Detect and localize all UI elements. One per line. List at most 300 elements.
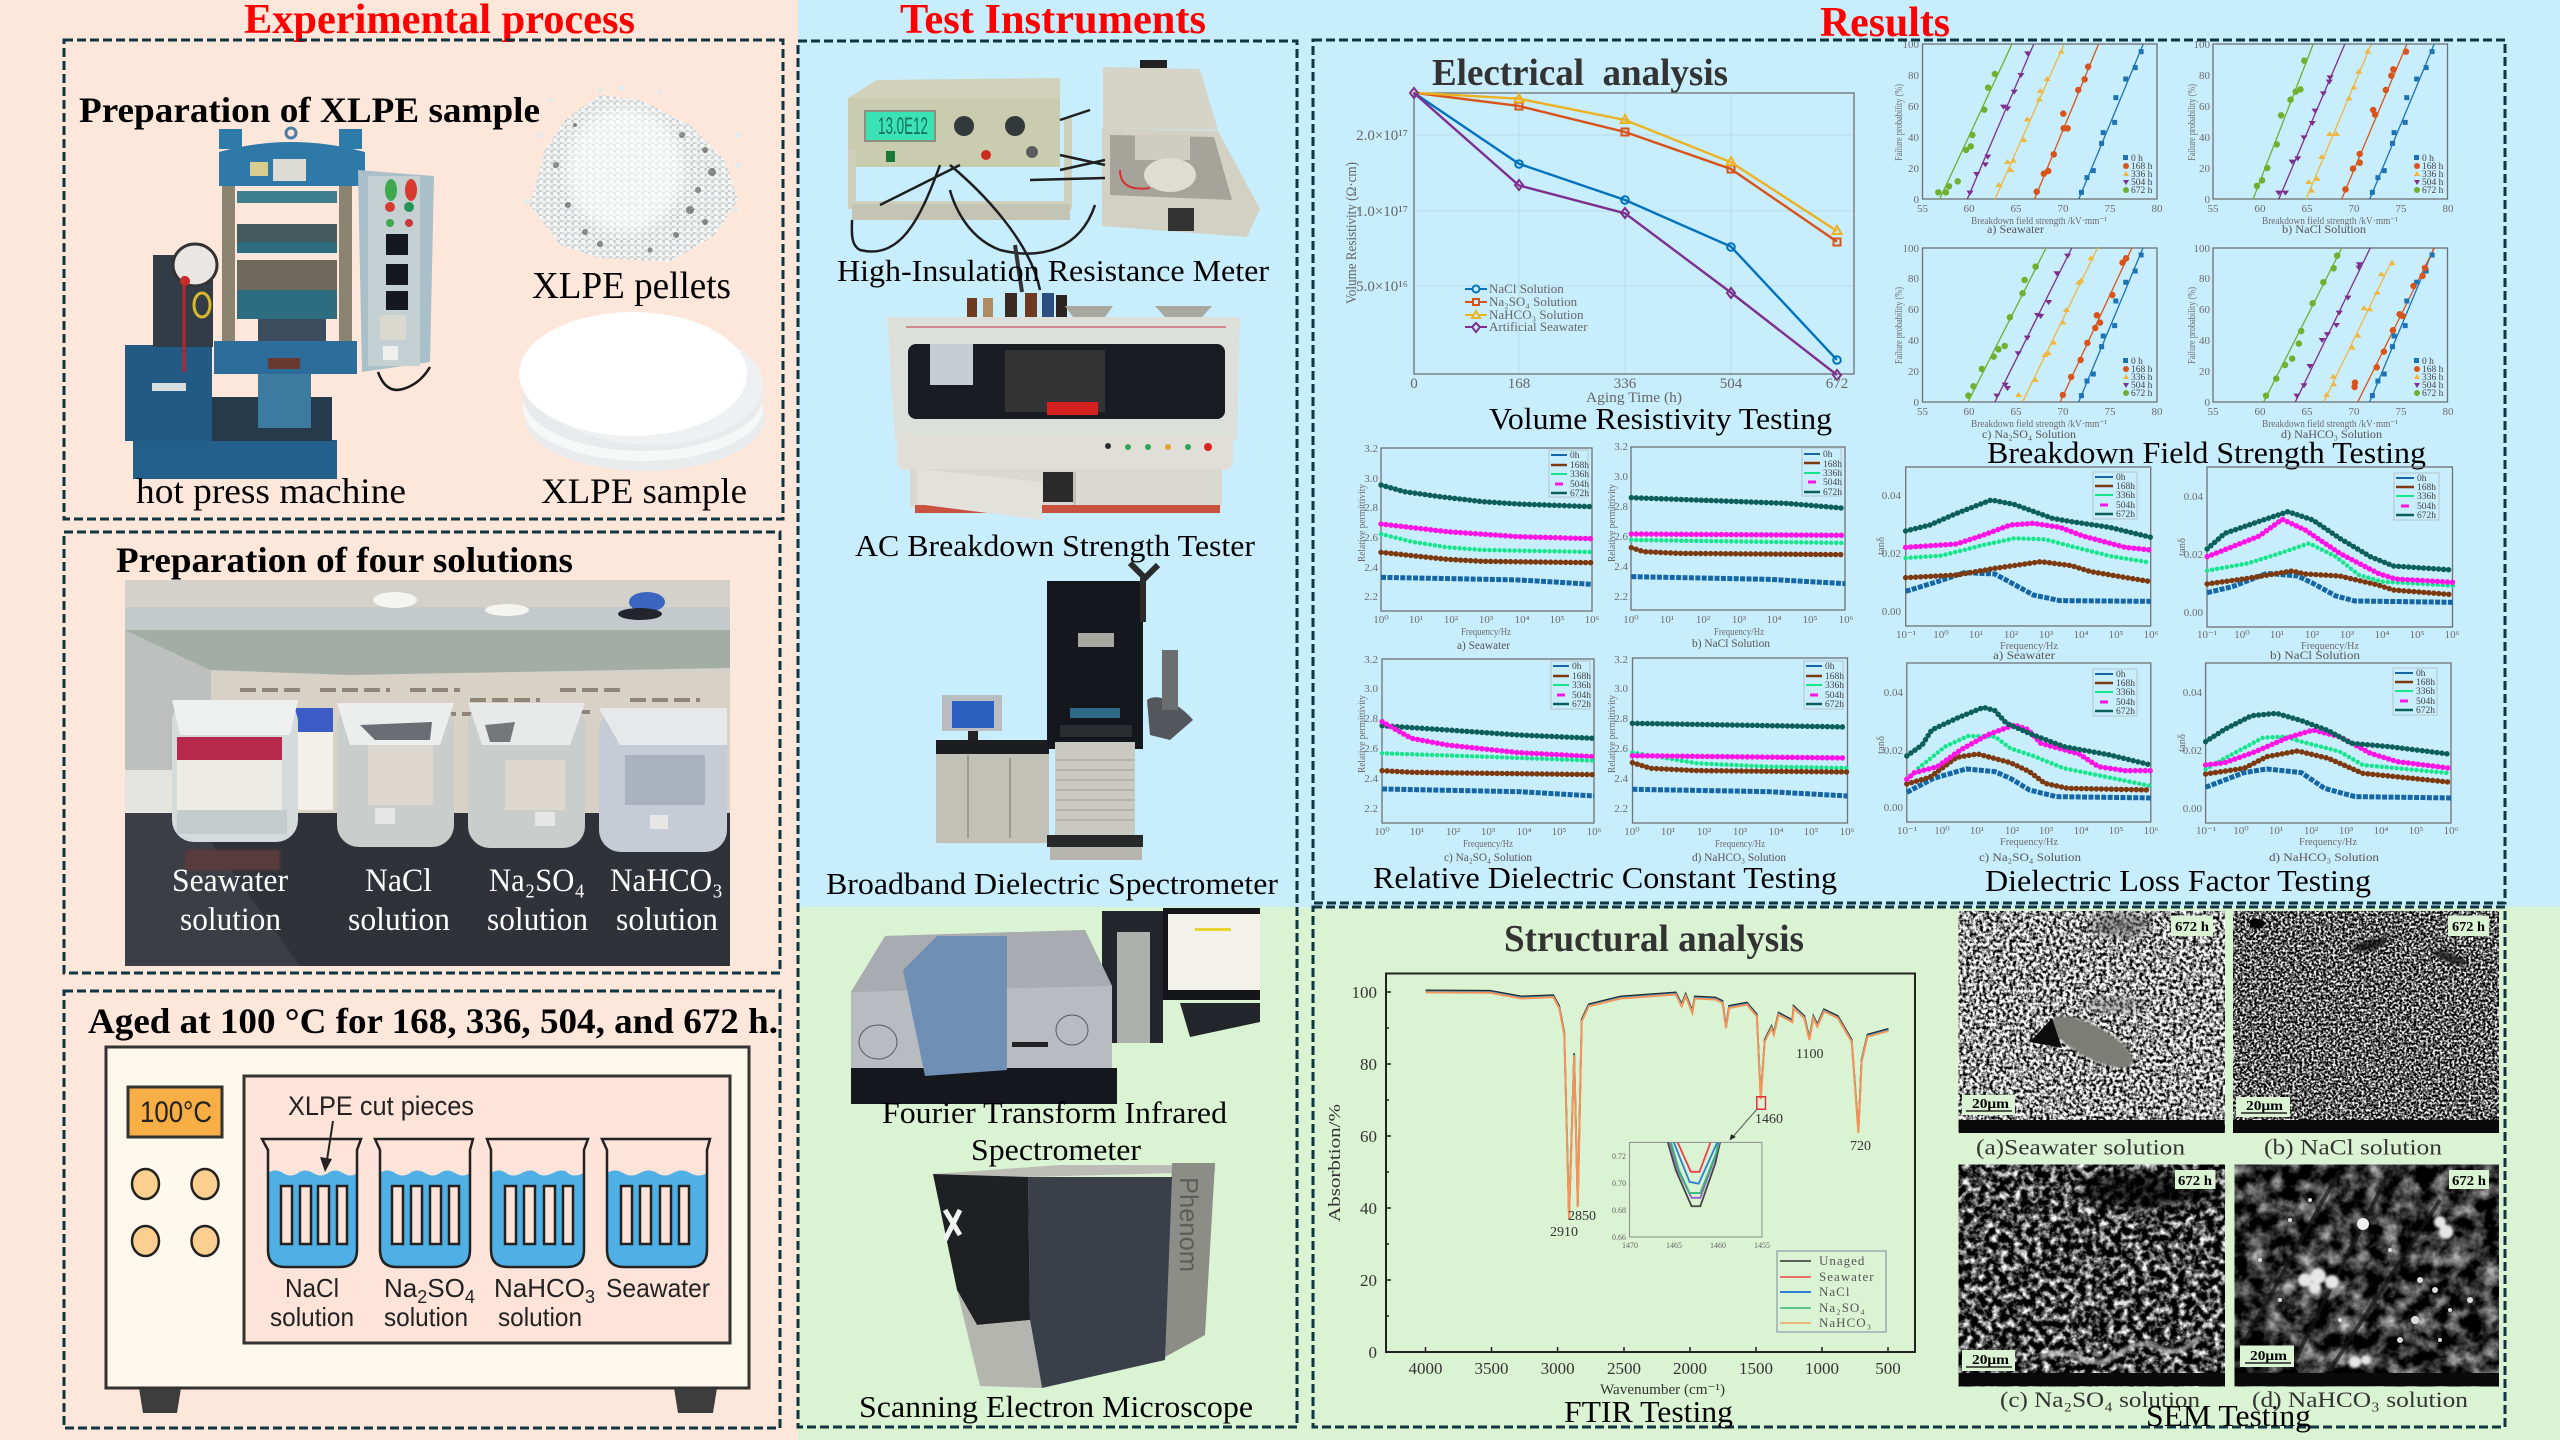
text: Preparation of XLPE sample: Preparation of XLPE sample	[79, 90, 540, 130]
chart: permittivity d) NaHCO3: 2.4	[1614, 773, 1628, 785]
legend: 672h	[1825, 700, 1844, 710]
chart: breakdown c) Na2SO4: 80	[1908, 273, 1920, 285]
chart: breakdown b) NaCl: 65	[2302, 203, 2313, 215]
chart: breakdown a) Seawater: 80	[2152, 203, 2163, 215]
chart: volume resistivity line chart: 168	[1508, 376, 1530, 392]
chart: FTIR spectra: 1500	[1739, 1359, 1773, 1378]
chart: dielectric loss b) NaCl: 0.04	[2184, 491, 2204, 503]
legend: FTIR samples: NaHCO₃	[1819, 1315, 1872, 1330]
chart: dielectric loss a) Seawater: 0.00	[1882, 606, 1902, 618]
photo: high-insulation resistance meter: 13.0E12	[878, 113, 928, 140]
legend: 672h	[2417, 511, 2436, 521]
label: Scanning Electron Microscope: Scanning Electron Microscope	[859, 1389, 1253, 1424]
chart: FTIR spectra: 1465	[1666, 1241, 1682, 1250]
chart: FTIR spectra: 2500	[1607, 1359, 1641, 1378]
panel: preparation of four solutions	[64, 532, 780, 973]
text: solution 1: solution	[180, 902, 281, 938]
legend	[2123, 357, 2153, 399]
chart: dielectric loss b) NaCl: 10²	[2305, 629, 2320, 641]
chart: FTIR spectra: 0.68	[1612, 1206, 1626, 1215]
chart: permittivity a) Seawater: 10⁰	[1373, 614, 1389, 626]
chart: permittivity c) Na2SO4: c) Na₂SO₄ Solution	[1444, 850, 1532, 864]
chart: dielectric loss d) NaHCO3: 10¹	[2269, 825, 2283, 837]
chart: volume resistivity line chart: 336	[1614, 376, 1637, 392]
chart: breakdown a) Seawater	[1893, 39, 2163, 236]
legend: 672 h	[2131, 186, 2153, 196]
chart: dielectric loss b) NaCl: 10⁴	[2375, 629, 2390, 641]
legend	[2123, 154, 2153, 196]
legend: 672h	[1823, 488, 1842, 498]
legend	[1804, 661, 1844, 710]
chart: breakdown c) Na2SO4: Failure probability (%)	[1893, 287, 1905, 364]
chart: permittivity d) NaHCO3: 3.2	[1614, 654, 1628, 666]
legend: 672 h	[2131, 389, 2153, 399]
chart: dielectric loss d) NaHCO3: 10²	[2304, 825, 2319, 837]
text: solution 4: solution	[616, 902, 718, 938]
legend: volume resistivity	[1465, 281, 1588, 334]
chart: permittivity b) NaCl: 2.6	[1614, 531, 1628, 543]
legend: volume resistivity: Artificial Seawater	[1489, 319, 1588, 334]
chart: FTIR spectra: Absorbtion/%	[1325, 1104, 1344, 1222]
legend: 336h	[1570, 470, 1589, 480]
chart: breakdown d) NaHCO3: 0	[2204, 397, 2210, 409]
chart: dielectric loss a) Seawater: 10¹	[1969, 629, 1983, 641]
chart: breakdown c) Na2SO4: 60	[1908, 304, 1920, 316]
chart: permittivity c) Na2SO4: 10⁰	[1374, 826, 1390, 838]
chart: dielectric loss a) Seawater: 0.04	[1882, 490, 1902, 502]
legend: 168h	[2416, 678, 2435, 688]
chart: permittivity b) NaCl: 3.2	[1614, 441, 1628, 453]
chart: breakdown c) Na2SO4: 70	[2058, 406, 2069, 418]
panel: results structural analysis	[1313, 907, 2505, 1433]
chart: FTIR spectra	[1325, 974, 1915, 1398]
chart: breakdown c) Na2SO4: 100	[1902, 243, 1920, 255]
legend: 0h	[1572, 662, 1582, 672]
label: XLPE cut pieces: XLPE cut pieces	[288, 1091, 474, 1121]
chart: dielectric loss a) Seawater: tanδ	[1875, 537, 1887, 555]
chart: permittivity c) Na2SO4: 10⁶	[1587, 826, 1602, 838]
chart: dielectric loss d) NaHCO3: 0.02	[2183, 745, 2202, 757]
chart: permittivity b) NaCl: Frequency/Hz	[1714, 626, 1764, 638]
chart: permittivity c) Na2SO4: 2.4	[1364, 773, 1378, 785]
icon: hot press machine photo	[125, 128, 434, 479]
chart: permittivity d) NaHCO3: Frequency/Hz	[1715, 838, 1765, 850]
chart: permittivity a) Seawater: a) Seawater	[1457, 638, 1510, 652]
chart: breakdown a) Seawater: 100	[1902, 39, 1920, 51]
chart: permittivity a) Seawater: Relative permittivity	[1356, 484, 1368, 562]
chart: volume resistivity line chart: Aging Time (h)	[1586, 390, 1682, 406]
icon: stacked XLPE sample discs	[519, 312, 765, 471]
chart: breakdown c) Na2SO4: 0	[1914, 397, 1920, 409]
label: NaCl solution: solution	[270, 1302, 354, 1332]
caption: (d) NaHCO3 solution: (d) NaHCO₃ solution	[2252, 1387, 2468, 1412]
text: NaCl: NaCl	[365, 863, 432, 899]
legend: 0h	[2116, 473, 2126, 483]
chart: breakdown a) Seawater: 75	[2104, 203, 2116, 215]
chart: dielectric loss c) Na2SO4: c) Na₂SO₄ Solution	[1979, 850, 2081, 864]
label: Na2SO4 solution: 2	[417, 1287, 427, 1307]
label: Na2SO4 solution: 4	[465, 1287, 475, 1307]
image: SEM NaCl: 20μm	[2246, 1099, 2283, 1114]
chart: breakdown d) NaHCO3: 100	[2194, 243, 2210, 255]
chart: permittivity b) NaCl: 2.4	[1614, 561, 1628, 573]
chart: permittivity d) NaHCO3: 2.8	[1614, 713, 1628, 725]
chart: permittivity b) NaCl: 10⁶	[1839, 614, 1854, 626]
image: SEM seawater: 20μm	[1972, 1097, 2009, 1112]
chart: breakdown d) NaHCO3: 55	[2208, 406, 2219, 418]
chart: permittivity d) NaHCO3: 10⁶	[1840, 826, 1855, 838]
label: Breakdown Field Strength Testing: Breakdown Field Strength Testing	[1987, 435, 2426, 470]
label: Na2SO4 solution: Na	[384, 1273, 475, 1307]
chart: permittivity a) Seawater: 10¹	[1409, 614, 1423, 626]
chart: dielectric loss a) Seawater: 10⁻¹	[1896, 629, 1916, 641]
chart: dielectric loss d) NaHCO3: tanδ	[2176, 734, 2188, 752]
chart: breakdown a) Seawater: 80	[1908, 70, 1920, 82]
legend: 0h	[2416, 669, 2426, 679]
chart: breakdown d) NaHCO3: Breakdown field strength /kV·mm⁻¹	[2262, 418, 2398, 430]
chart: dielectric loss a) Seawater: 10⁵	[2109, 629, 2124, 641]
chart: breakdown c) Na2SO4: 75	[2104, 406, 2116, 418]
label: Broadband Dielectric Spectrometer: Broadband Dielectric Spectrometer	[826, 866, 1279, 901]
chart: FTIR spectra: 60	[1360, 1127, 1377, 1146]
chart: breakdown b) NaCl: b) NaCl Solution	[2282, 222, 2366, 236]
chart: FTIR spectra: Wavenumber (cm⁻¹)	[1600, 1382, 1725, 1398]
chart: permittivity a) Seawater: 10⁴	[1515, 614, 1530, 626]
legend: 336 h	[2131, 373, 2153, 383]
chart: permittivity b) NaCl: 2.8	[1614, 501, 1628, 513]
legend: 336 h	[2422, 373, 2444, 383]
chart: permittivity d) NaHCO3: 10⁴	[1769, 826, 1784, 838]
chart: breakdown c) Na2SO4: Breakdown field strength /kV·mm⁻¹	[1971, 418, 2107, 430]
chart: FTIR spectra: 1460	[1710, 1241, 1726, 1250]
chart: dielectric loss a) Seawater: 10³	[2039, 629, 2054, 641]
chamber with beakers	[244, 1076, 730, 1343]
legend: 504 h	[2422, 178, 2444, 188]
chart: permittivity b) NaCl: 10²	[1696, 614, 1711, 626]
chart: breakdown d) NaHCO3: 60	[2254, 406, 2266, 418]
legend: 0h	[1825, 662, 1835, 672]
chart: FTIR spectra: 0.70	[1612, 1179, 1626, 1188]
chart: permittivity c) Na2SO4: 3.0	[1364, 683, 1378, 695]
chart: FTIR spectra: 0.66	[1612, 1233, 1626, 1242]
chart: permittivity d) NaHCO3: 2.6	[1614, 743, 1628, 755]
panel: aging oven	[64, 991, 780, 1428]
chart: permittivity d) NaHCO3	[1606, 654, 1855, 864]
chart: permittivity b) NaCl	[1606, 441, 1854, 650]
label: XLPE pellets: XLPE pellets	[532, 265, 731, 307]
chart: FTIR spectra: 80	[1360, 1055, 1377, 1074]
label: Fourier Transform Infrared Spectrometer: Spectrometer	[971, 1132, 1142, 1167]
chart: dielectric loss a) Seawater: 10⁴	[2074, 629, 2089, 641]
chart: permittivity b) NaCl: 10⁰	[1623, 614, 1639, 626]
chart: breakdown b) NaCl: 55	[2208, 203, 2219, 215]
legend: 168 h	[2131, 365, 2153, 375]
legend: FTIR samples: NaCl	[1819, 1284, 1850, 1299]
label: High-Insulation Resistance Meter: High-Insulation Resistance Meter	[837, 253, 1270, 288]
legend: volume resistivity: NaCl Solution	[1489, 281, 1564, 296]
legend	[2414, 154, 2444, 196]
chart: permittivity c) Na2SO4: 10⁵	[1552, 826, 1567, 838]
legend: 0 h	[2422, 154, 2434, 164]
chart: breakdown b) NaCl: 20	[2199, 163, 2210, 175]
text: Phenom brand on device: Phenom	[1174, 1177, 1204, 1272]
legend	[2393, 668, 2437, 716]
legend: 168h	[1825, 672, 1844, 682]
chart: breakdown c) Na2SO4: 80	[2152, 406, 2163, 418]
icon: oven body	[106, 1047, 749, 1388]
chart: breakdown d) NaHCO3: 80	[2199, 273, 2210, 285]
chart: dielectric loss b) NaCl: 10¹	[2270, 629, 2284, 641]
chart: breakdown a) Seawater: 20	[1908, 163, 1920, 175]
legend: 504 h	[2131, 178, 2153, 188]
legend: 168h	[1572, 672, 1591, 682]
legend: 168h	[1823, 460, 1842, 470]
chart: FTIR spectra: 3500	[1474, 1359, 1508, 1378]
chart: breakdown b) NaCl: 75	[2396, 203, 2407, 215]
chart: permittivity c) Na2SO4: 2.8	[1364, 713, 1378, 725]
chart: permittivity d) NaHCO3: 3.0	[1614, 683, 1628, 695]
label: Na2SO4 solution: SO	[427, 1273, 465, 1303]
chart: breakdown d) NaHCO3: Failure probability (%)	[2186, 287, 2198, 364]
legend: 0 h	[2131, 357, 2143, 367]
chart: breakdown c) Na2SO4: 65	[2010, 406, 2022, 418]
chart: FTIR spectra: 1455	[1754, 1241, 1770, 1250]
chart: permittivity c) Na2SO4: 10²	[1446, 826, 1461, 838]
chart: permittivity a) Seawater: 3.0	[1364, 473, 1378, 485]
legend: 336h	[1825, 681, 1844, 691]
chart: permittivity d) NaHCO3: d) NaHCO₃ Solution	[1692, 850, 1786, 864]
chart: dielectric loss d) NaHCO3: 10³	[2339, 825, 2354, 837]
chart: dielectric loss c) Na2SO4: 0.02	[1884, 745, 1903, 757]
chart: dielectric loss c) Na2SO4: 0.00	[1884, 802, 1904, 814]
icon: temperature display	[128, 1087, 222, 1137]
legend: volume resistivity: Na₂SO₄ Solution	[1489, 294, 1578, 309]
icon: beaker Na2SO4	[375, 1139, 473, 1267]
chart: permittivity a) Seawater: 10³	[1479, 614, 1494, 626]
photo: four beakers on lab bench	[125, 580, 730, 966]
chart: permittivity b) NaCl: 10¹	[1660, 614, 1674, 626]
label: Relative Dielectric Constant Testing: Relative Dielectric Constant Testing	[1373, 860, 1837, 895]
chart: permittivity a) Seawater: 3.2	[1364, 443, 1378, 455]
legend: FTIR samples	[1777, 1251, 1886, 1332]
chart: dielectric loss c) Na2SO4: 10⁴	[2074, 825, 2089, 837]
legend: 0h	[1823, 450, 1833, 460]
chart: volume resistivity line chart: 0	[1410, 376, 1418, 392]
chart: permittivity b) NaCl: 10⁵	[1803, 614, 1818, 626]
image: SEM NaHCO3: 20μm	[2250, 1349, 2287, 1364]
chart: FTIR spectra: 500	[1875, 1359, 1901, 1378]
legend: 504h	[2417, 502, 2436, 512]
legend: 336h	[2416, 687, 2435, 697]
text: solution 2: solution	[348, 902, 450, 938]
legend: 672 h	[2422, 186, 2444, 196]
legend: 672h	[2116, 510, 2135, 520]
chart: breakdown a) Seawater: a) Seawater	[1987, 222, 2044, 236]
legend: 672h	[1570, 489, 1589, 499]
legend: FTIR samples: Unaged	[1819, 1253, 1865, 1268]
panel: results electrical analysis	[1313, 39, 2505, 903]
chart: permittivity c) Na2SO4	[1356, 654, 1602, 864]
chart: dielectric loss b) NaCl: Frequency/Hz	[2301, 640, 2359, 652]
chart: FTIR spectra: 20	[1360, 1271, 1377, 1290]
chart: permittivity b) NaCl: 10⁴	[1767, 614, 1782, 626]
chart: breakdown d) NaHCO3: 65	[2302, 406, 2313, 418]
chart: breakdown b) NaCl: 80	[2199, 70, 2210, 82]
image: SEM NaHCO3	[2234, 1164, 2499, 1386]
chart: dielectric loss c) Na2SO4: tanδ	[1875, 736, 1887, 754]
chart: permittivity a) Seawater: 2.8	[1364, 502, 1378, 514]
chart: FTIR spectra: 1470	[1622, 1241, 1638, 1250]
panel: test instruments	[798, 41, 1297, 1427]
legend: 336 h	[2131, 170, 2153, 180]
label: Volume Resistivity Testing: Volume Resistivity Testing	[1489, 401, 1832, 436]
chart: permittivity c) Na2SO4: Frequency/Hz	[1463, 838, 1513, 850]
chart: breakdown a) Seawater: 70	[2058, 203, 2069, 215]
chart: permittivity d) NaHCO3: 10⁵	[1804, 826, 1819, 838]
chart: dielectric loss b) NaCl: 0.00	[2184, 607, 2204, 619]
icon: control knobs	[132, 1169, 218, 1256]
chart: volume resistivity line chart: 504	[1720, 376, 1743, 392]
chart: permittivity a) Seawater	[1356, 443, 1600, 652]
legend: 336h	[2417, 492, 2436, 502]
chart: breakdown a) Seawater: Failure probability (%)	[1893, 84, 1905, 161]
legend: 168h	[1570, 461, 1589, 471]
chart: permittivity a) Seawater: 2.4	[1364, 562, 1378, 574]
legend: 672h	[2116, 707, 2135, 717]
chart: permittivity d) NaHCO3: 10⁰	[1624, 826, 1640, 838]
chart: permittivity a) Seawater: 2.6	[1364, 532, 1378, 544]
chart: dielectric loss a) Seawater: a) Seawater	[1993, 648, 2055, 662]
chart: dielectric loss c) Na2SO4: 10⁻¹	[1897, 825, 1917, 837]
chart: dielectric loss b) NaCl: tanδ	[2176, 538, 2188, 556]
chart: dielectric loss d) NaHCO3: 10⁰	[2233, 825, 2249, 837]
chart: dielectric loss a) Seawater: 10²	[2004, 629, 2019, 641]
chart: dielectric loss d) NaHCO3	[2176, 663, 2459, 864]
label: NaHCO3 solution: solution	[498, 1302, 582, 1332]
label: Na2SO4 solution: solution	[384, 1302, 468, 1332]
legend: 168h	[2116, 482, 2135, 492]
chart: breakdown b) NaCl	[2186, 39, 2454, 236]
title: Results: Results	[1820, 0, 1950, 46]
chart: permittivity a) Seawater: 10⁵	[1550, 614, 1565, 626]
chart: breakdown c) Na2SO4: c) Na₂SO₄ Solution	[1982, 427, 2076, 441]
legend: 504h	[1823, 478, 1842, 488]
chart: permittivity b) NaCl: Relative permittivity	[1606, 484, 1618, 562]
chart: dielectric loss a) Seawater: 10⁶	[2144, 629, 2159, 641]
legend: 504 h	[2422, 381, 2444, 391]
icon: beaker Seawater	[602, 1139, 710, 1267]
image: SEM seawater	[1959, 911, 2225, 1133]
chart: breakdown b) NaCl: 80	[2442, 203, 2454, 215]
label: NaHCO3 solution: 3	[585, 1287, 595, 1307]
image: SEM Na2SO4: 20μm	[1972, 1353, 2009, 1368]
chart: breakdown d) NaHCO3: 80	[2442, 406, 2454, 418]
chart: dielectric loss c) Na2SO4: 10⁰	[1934, 825, 1950, 837]
photo: AC breakdown strength tester	[887, 293, 1240, 520]
chart: dielectric loss a) Seawater: Frequency/Hz	[2000, 640, 2058, 652]
chart: dielectric loss b) NaCl: 0.02	[2184, 549, 2203, 561]
legend: FTIR samples: Na₂SO₄	[1819, 1300, 1866, 1315]
legend: 504h	[1572, 691, 1591, 701]
chart: permittivity a) Seawater: 10⁶	[1585, 614, 1600, 626]
legend	[1551, 661, 1591, 710]
chart: volume resistivity line chart	[1344, 88, 1854, 406]
legend	[1802, 448, 1842, 498]
chart: breakdown d) NaHCO3: 60	[2199, 304, 2210, 316]
legend: 168h	[2116, 679, 2135, 689]
label: FTIR Testing: FTIR Testing	[1564, 1394, 1733, 1429]
image: SEM Na2SO4: 672 h	[2178, 1174, 2212, 1189]
chart: breakdown b) NaCl: 60	[2199, 101, 2210, 113]
chart: breakdown a) Seawater: Breakdown field strength /kV·mm⁻¹	[1971, 215, 2107, 227]
label: hot press machine: hot press machine	[136, 471, 406, 511]
chart: dielectric loss c) Na2SO4: 0.04	[1884, 687, 1904, 699]
chart: FTIR spectra: 1100	[1796, 1047, 1823, 1062]
legend	[2414, 357, 2444, 399]
photo: broadband dielectric spectrometer	[936, 563, 1193, 860]
legend: 504h	[2116, 698, 2135, 708]
chart: dielectric loss c) Na2SO4: 10¹	[1970, 825, 1984, 837]
chart: FTIR spectra: 0.72	[1612, 1152, 1626, 1161]
chart: breakdown b) NaCl: 60	[2254, 203, 2266, 215]
label: Fourier Transform Infrared Spectrometer: Fourier Transform Infrared	[882, 1095, 1228, 1130]
chart: permittivity d) NaHCO3: 2.2	[1614, 803, 1628, 815]
chart: permittivity b) NaCl: 10³	[1732, 614, 1747, 626]
chart: FTIR spectra: 2910	[1550, 1225, 1578, 1240]
chart: breakdown d) NaHCO3: d) NaHCO₃ Solution	[2281, 427, 2382, 441]
chart: FTIR spectra: 3000	[1541, 1359, 1575, 1378]
photo: scanning electron microscope	[933, 1163, 1215, 1388]
chart: permittivity b) NaCl: 3.0	[1614, 471, 1628, 483]
legend: FTIR samples: Seawater	[1819, 1269, 1875, 1284]
chart: dielectric loss b) NaCl	[2176, 467, 2460, 662]
panel: preparation of XLPE sample	[64, 40, 783, 519]
label: NaHCO3 solution: NaHCO	[494, 1273, 595, 1307]
chart: volume resistivity line chart: 2.0×10¹⁷	[1356, 128, 1408, 144]
chart: breakdown a) Seawater: 55	[1917, 203, 1928, 215]
chart: FTIR spectra: 1000	[1805, 1359, 1839, 1378]
chart: breakdown d) NaHCO3: 40	[2199, 335, 2210, 347]
legend: 672h	[1572, 700, 1591, 710]
caption: (b) NaCl solution: (b) NaCl solution	[2264, 1134, 2442, 1160]
chart: breakdown a) Seawater: 60	[1964, 203, 1975, 215]
chart: volume resistivity line chart: 1.0×10¹⁷	[1356, 204, 1408, 220]
chart: permittivity d) NaHCO3: 10²	[1697, 826, 1712, 838]
caption: (c) Na2SO4 solution: (c) Na₂SO₄ solution	[2000, 1387, 2200, 1412]
chart: dielectric loss d) NaHCO3: Frequency/Hz	[2299, 836, 2357, 848]
chart: breakdown b) NaCl: 0	[2204, 194, 2210, 206]
chart: dielectric loss c) Na2SO4	[1875, 663, 2159, 864]
icon: beaker NaHCO3	[487, 1139, 588, 1267]
chart: breakdown b) NaCl: 100	[2194, 39, 2210, 51]
chart: dielectric loss c) Na2SO4: 10⁶	[2144, 825, 2159, 837]
chart: permittivity b) NaCl: 2.2	[1614, 591, 1628, 603]
chart: breakdown c) Na2SO4: 40	[1908, 335, 1920, 347]
chart: breakdown c) Na2SO4: 20	[1908, 366, 1920, 378]
chart: permittivity d) NaHCO3: Relative permittivity	[1606, 695, 1618, 773]
icon: beaker NaCl	[262, 1139, 361, 1267]
chart: permittivity c) Na2SO4: 2.2	[1364, 803, 1378, 815]
text: Na2SO4: Na₂SO₄	[489, 863, 585, 899]
chart: dielectric loss c) Na2SO4: Frequency/Hz	[2000, 836, 2058, 848]
legend	[2093, 472, 2137, 520]
chart: volume resistivity line chart: 672	[1826, 376, 1848, 392]
legend: 0 h	[2131, 154, 2143, 164]
chart: permittivity a) Seawater: 10²	[1444, 614, 1459, 626]
chart: dielectric loss d) NaHCO3: 0.00	[2183, 803, 2202, 815]
chart: dielectric loss d) NaHCO3: 10⁴	[2374, 825, 2389, 837]
label: NaCl solution: NaCl	[285, 1273, 339, 1303]
